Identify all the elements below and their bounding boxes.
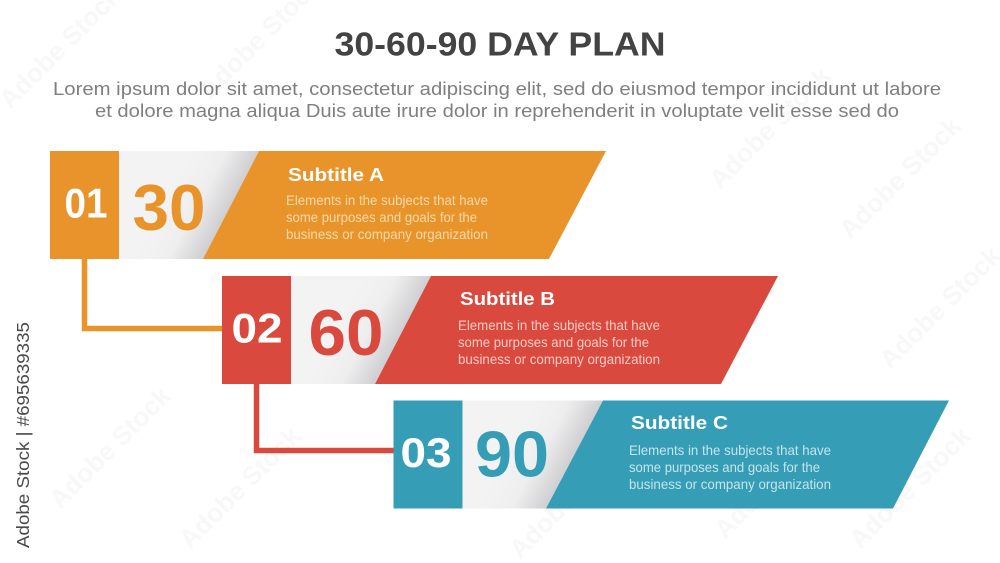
title: 30-60-90 DAY PLAN [334,26,666,62]
description: Elements in the subjects that have [286,192,488,208]
description: some purposes and goals for the [629,459,820,475]
day band [462,400,603,508]
text: Adobe Stock [503,430,637,563]
description: some purposes and goals for the [286,209,477,225]
text: Adobe Stock [703,60,837,194]
text: Adobe Stock [843,420,977,554]
description: business or company organization [629,476,831,492]
stock watermark id: Adobe Stock | #695639335 [13,322,33,548]
description: Elements in the subjects that have [629,442,831,458]
step number: 03 [400,429,452,476]
subtitle: Subtitle A [288,164,384,185]
content band [546,400,949,508]
description [629,442,831,492]
text: Adobe Stock [833,110,967,244]
intro text: Lorem ipsum dolor sit amet, consectetur adipiscing elit, sed do eiusmod tempor incididunt ut labore [53,78,941,99]
connector: step 01 to step 02 [84,259,222,328]
description: Elements in the subjects that have [458,317,660,333]
subtitle: Subtitle C [631,412,728,433]
description: business or company organization [458,351,660,367]
text: Adobe Stock [708,410,842,544]
text: Adobe Stock [43,380,177,514]
number block [222,276,291,384]
panel: step 01, 30 days [50,151,606,259]
connector: step 02 to step 03 [256,384,394,450]
description [286,192,488,242]
subtitle: Subtitle B [460,288,555,309]
day band [291,276,431,384]
day band [119,151,259,259]
step number: 01 [64,180,108,226]
panel: step 02, 60 days [222,276,778,384]
description: some purposes and goals for the [458,334,649,350]
intro text [53,78,941,121]
number block [50,151,119,259]
content band [375,276,778,384]
content band [203,151,606,259]
description: business or company organization [286,226,488,242]
step number: 02 [232,304,282,352]
intro text: et dolore magna aliqua Duis aute irure dolor in reprehenderit in voluptate velit esse sed do [95,100,899,121]
day count: 60 [308,296,384,369]
description [458,317,660,367]
number block [394,400,462,508]
day count: 90 [475,418,549,490]
panel: step 03, 90 days [394,400,949,508]
text: Adobe Stock [173,420,307,554]
day count: 30 [132,171,206,244]
